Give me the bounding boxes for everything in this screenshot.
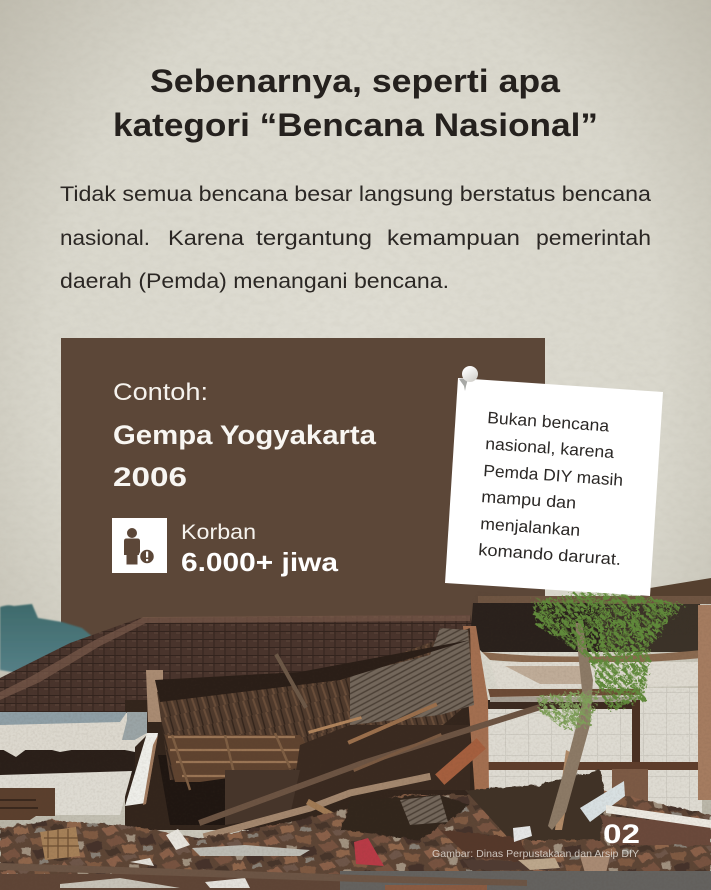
photo grain (0, 590, 711, 890)
title: Sebenarnya, seperti apa (150, 63, 560, 99)
main roof (0, 615, 480, 713)
icon: pin (459, 366, 478, 391)
image credit: Gambar: Dinas Perpustakaan dan Arsip DIY (432, 848, 639, 860)
plaster and metal fragments (40, 750, 711, 873)
stat label: Korban: Korban (181, 521, 256, 544)
intro paragraph: daerah (Pemda) menangani bencana. (60, 270, 449, 293)
intro paragraph (60, 183, 651, 293)
stat value: victims: 6.000+ jiwa (181, 547, 339, 577)
debris pile (0, 770, 711, 875)
mountain backdrop (0, 604, 93, 673)
intro paragraph: Tidak semua bencana besar langsung berstatus bencana (60, 183, 651, 206)
photo: collapsed house after earthquake (0, 578, 711, 890)
fallen beams (202, 656, 537, 858)
intro paragraph: kemampuan (387, 227, 520, 250)
title: kategori “Bencana Nasional” (113, 107, 598, 143)
heading: event name: Gempa Yogyakarta (113, 420, 377, 450)
note text (478, 409, 624, 569)
icon: victim with warning badge (112, 518, 167, 573)
right building upper (463, 578, 711, 813)
dark interior (158, 755, 225, 825)
note text: nasional, karena (485, 435, 616, 462)
intro paragraph: pemerintah (536, 227, 651, 250)
title (113, 63, 598, 143)
label: Contoh: Contoh: (113, 379, 208, 406)
heading: event name (113, 420, 377, 492)
note text: komando darurat. (478, 541, 622, 569)
intro paragraph: Karena (168, 227, 244, 250)
intro paragraph: nasional. (60, 227, 150, 250)
note text: mampu dan (481, 488, 577, 513)
intro paragraph: tergantung (256, 227, 372, 250)
page number: 02 (603, 819, 640, 849)
left wall remains (0, 670, 163, 820)
tree (533, 590, 684, 830)
collapsed roof (155, 628, 474, 825)
dark base under the collapse (125, 700, 490, 830)
road and long plank (0, 863, 711, 890)
note text: Bukan bencana (487, 409, 611, 436)
sticky note (445, 366, 663, 596)
heading: event name: 2006 (113, 462, 187, 492)
panel: example card (61, 338, 545, 638)
note text: Pemda DIY masih (483, 462, 624, 490)
note text: menjalankan (480, 515, 581, 540)
